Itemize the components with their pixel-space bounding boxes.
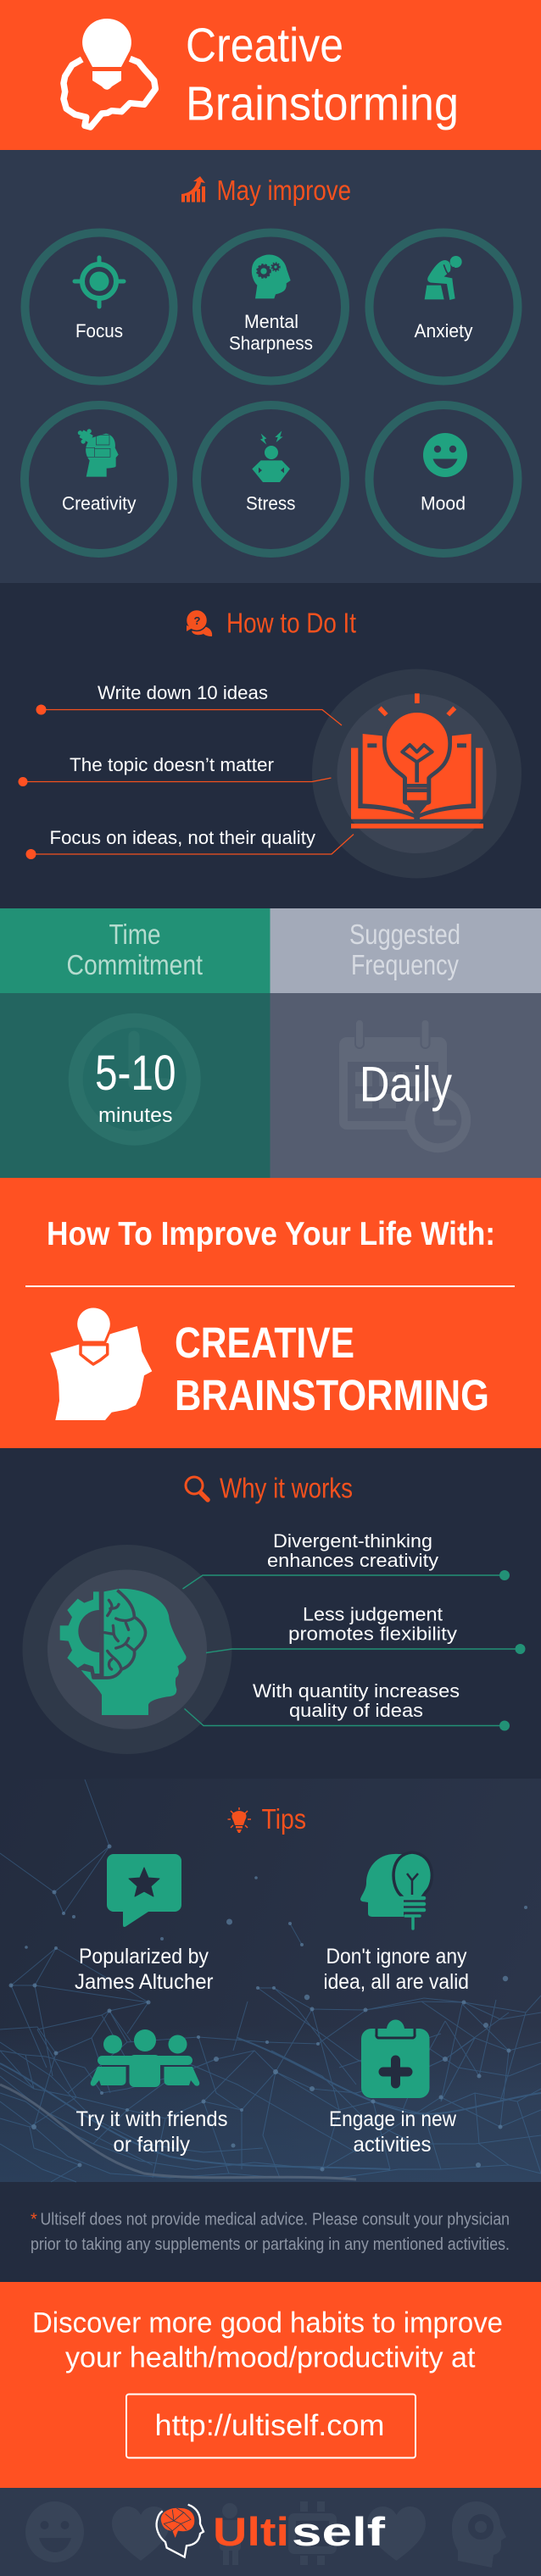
icons: faint background icons [25, 2501, 506, 2568]
icon: brain with light bulb [64, 19, 155, 127]
tip: engage in new activities [329, 2020, 457, 2157]
callout: less judgement: promotes flexibility [288, 1624, 457, 1644]
tip: try it with friends or family [76, 2029, 227, 2157]
callout: write down 10 ideas: Write down 10 ideas [98, 682, 268, 703]
item: creativity [25, 405, 173, 553]
panel: tips [0, 1779, 541, 2282]
tip: do not ignore any idea: Don't ignore any [326, 1945, 467, 1968]
callout: the topic does not matter: The topic doesn’t matter [70, 754, 274, 775]
icon: head with bulb [50, 1307, 152, 1420]
icon: three people [91, 2029, 199, 2087]
wordmark: self [292, 2509, 385, 2554]
icon: faint clock [75, 1020, 193, 1138]
title [186, 19, 459, 130]
value: 5-10 minutes: 5-10 [95, 1046, 176, 1101]
value: 5-10 minutes: minutes [98, 1104, 173, 1127]
icon: question chat bubbles: ? [193, 614, 200, 627]
title: creative brainstorming [175, 1319, 489, 1419]
text: discover more good habits: your health/mood/productivity at [65, 2342, 476, 2374]
icon: head with bulb outline [360, 1852, 432, 1929]
tip: engage in new activities: Engage in new [329, 2107, 457, 2131]
item: mental sharpness [197, 232, 345, 381]
heading: time commitment: Commitment [66, 949, 203, 980]
callout: with quantity: With quantity increases [253, 1680, 460, 1702]
callout: with quantity: quality of ideas [289, 1700, 423, 1721]
tip: do not ignore any idea [324, 1852, 469, 1994]
item: anxiety: Anxiety [414, 320, 473, 341]
item: anxiety [370, 232, 517, 381]
callout: with quantity [185, 1680, 510, 1730]
item: mood: Mood [421, 493, 466, 514]
text: discover more good habits [32, 2307, 503, 2374]
heading: tips: Tips [261, 1803, 306, 1835]
panel: why it works [0, 1448, 541, 1780]
item: focus [25, 232, 173, 381]
icon: target [75, 258, 124, 307]
panel: footer [0, 2488, 541, 2576]
heading: time commitment: Time [109, 919, 161, 950]
icon: growth chart [181, 176, 205, 202]
item: stress: Stress [246, 493, 295, 514]
icon: head with puzzle pieces [74, 425, 119, 477]
value: daily: Daily [360, 1058, 452, 1112]
title: Creative [186, 19, 343, 73]
link button: http://ultiself.com [154, 2409, 385, 2442]
illustration: book with light bulb [312, 669, 521, 878]
heading: may improve: May improve [217, 175, 351, 206]
panel: how to do it [0, 583, 541, 908]
callout: less judgement: Less judgement [303, 1603, 443, 1625]
tip: try it with friends or family: or family [114, 2133, 190, 2157]
heading: how to improve your life with: How To Improve Your Life With: [47, 1216, 495, 1252]
disclaimer [31, 2210, 510, 2254]
wordmark [213, 2509, 385, 2554]
callout: divergent thinking: enhances creativity [267, 1550, 438, 1571]
heading: how to do it: How to Do It [226, 607, 356, 639]
wordmark: Ulti [213, 2509, 289, 2554]
panel: how to improve banner [0, 1178, 541, 1448]
panel: may improve [0, 150, 541, 583]
heading: suggested frequency [349, 919, 460, 980]
icon: smiley [423, 433, 467, 477]
callout: write down 10 ideas [36, 682, 342, 725]
item: stress [197, 405, 345, 553]
tip: popularized by james altucher: James Altucher [75, 1970, 214, 1994]
heading: why it works: Why it works [220, 1473, 353, 1503]
icon: clipboard with plus [361, 2020, 429, 2098]
heading: suggested frequency: Frequency [351, 949, 459, 980]
panel: header [0, 0, 541, 150]
callout: less judgement [206, 1603, 526, 1654]
icon: bulb with rays [227, 1807, 251, 1833]
illustration: head with gear and brain [22, 1545, 232, 1754]
icon: stressed person [252, 430, 290, 482]
item: mood [370, 405, 517, 553]
icon: seated worried person [425, 256, 462, 300]
callout: focus on ideas: Focus on ideas, not their quality [49, 827, 315, 848]
tip: engage in new activities: activities [353, 2133, 431, 2157]
icon: faint calendar and clock [339, 1019, 466, 1148]
title: creative brainstorming: BRAINSTORMING [175, 1371, 489, 1419]
disclaimer: * [31, 2210, 37, 2229]
icon: head with network brain [157, 2505, 204, 2557]
icon: magnifier [186, 1477, 208, 1500]
tip: popularized by james altucher [75, 1854, 214, 1994]
logo: ultiself [157, 2505, 385, 2557]
title: Brainstorming [186, 76, 459, 130]
title: creative brainstorming: CREATIVE [175, 1319, 354, 1367]
callout: focus on ideas [25, 827, 354, 859]
panel: suggested frequency [270, 908, 541, 1178]
panel: time commitment [0, 908, 270, 1178]
tip: do not ignore any idea: idea, all are valid [324, 1970, 469, 1994]
value: 5-10 minutes [95, 1046, 176, 1127]
item: mental sharpness: Mental [244, 311, 298, 332]
callout: divergent thinking: Divergent-thinking [273, 1530, 432, 1552]
heading: time commitment [66, 919, 203, 980]
callout: divergent thinking [183, 1530, 510, 1589]
heading: suggested frequency: Suggested [349, 919, 460, 950]
tip: try it with friends or family: Try it with friends [76, 2107, 227, 2131]
icon: question chat bubbles [187, 610, 212, 636]
tip: popularized by james altucher: Popularized by [79, 1945, 209, 1968]
callout: the topic does not matter [19, 754, 331, 786]
text: discover more good habits: Discover more good habits to improve [32, 2307, 503, 2339]
panel: call to action [0, 2282, 541, 2488]
icon: head with gears [252, 254, 291, 298]
item: creativity: Creativity [62, 493, 136, 514]
link button [126, 2395, 416, 2457]
icon: speech bubble with star [107, 1854, 181, 1927]
item: focus: Focus [75, 320, 123, 341]
item: mental sharpness: Sharpness [229, 332, 313, 354]
